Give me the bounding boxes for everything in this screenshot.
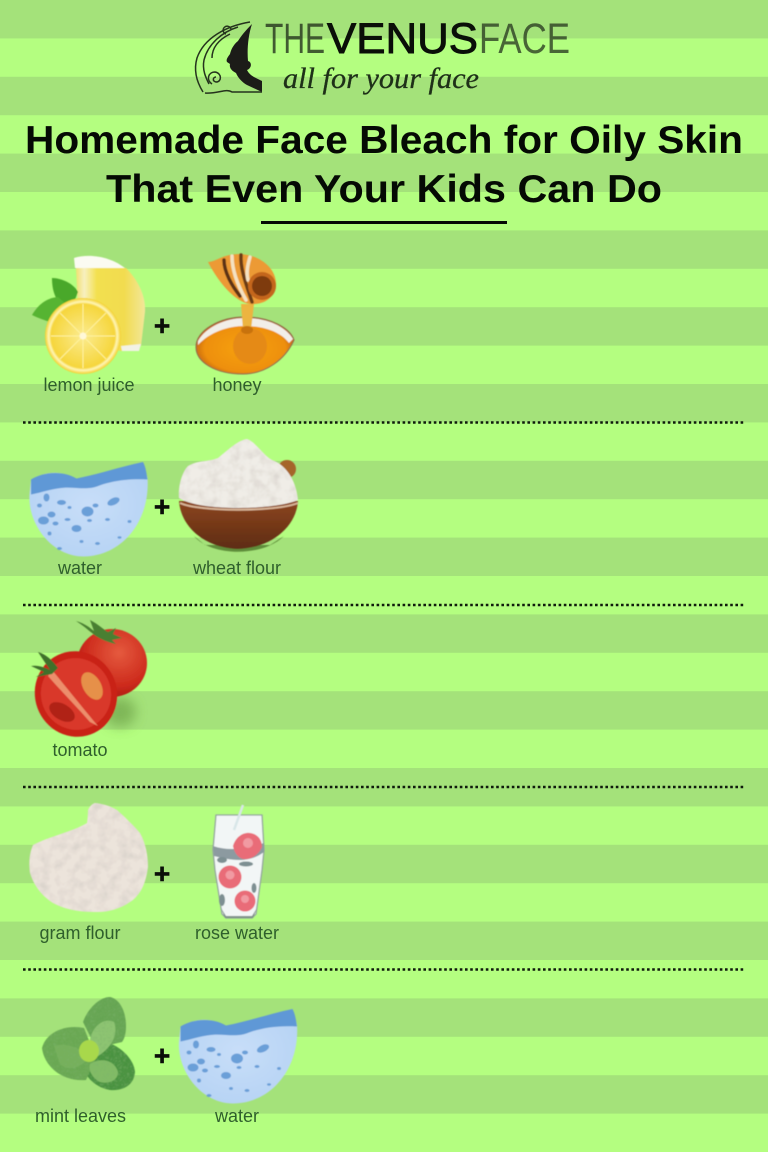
label: lemon juice: lemon juice	[43, 375, 135, 395]
plus: +	[154, 858, 170, 889]
title: That Even Your Kids Can Do	[106, 168, 662, 211]
icon: honey dipper and bowl	[196, 254, 294, 374]
label: mint leaves: mint leaves	[35, 1106, 126, 1126]
divider	[23, 968, 745, 971]
icon: gram flour	[29, 803, 148, 912]
icon: lemon juice glass and lemon	[32, 256, 145, 374]
recipe 2: water + wheat flour	[29, 439, 298, 578]
divider	[23, 421, 745, 424]
label: wheat flour: wheat flour	[192, 558, 281, 578]
logo	[196, 15, 570, 95]
tagline: all for your face	[283, 62, 479, 95]
icon: bowl of wheat flour	[179, 439, 298, 552]
divider	[23, 786, 745, 788]
label: honey: honey	[212, 375, 262, 395]
plus: +	[154, 1040, 170, 1071]
icon: mint leaves	[42, 997, 135, 1090]
recipe 1: lemon juice + honey	[32, 254, 294, 395]
icon: water	[29, 462, 148, 556]
recipe 3: tomato	[23, 620, 147, 760]
recipe 4: gram flour + rose water	[29, 803, 279, 943]
icon: tomatoes	[23, 620, 147, 748]
divider	[23, 604, 745, 606]
plus: +	[154, 491, 170, 522]
label: water: water	[57, 558, 102, 578]
recipe 5: mint leaves + water	[35, 997, 297, 1126]
title underline	[261, 221, 507, 224]
wordmark: THE	[265, 15, 325, 63]
logo: FACE	[479, 15, 570, 63]
icon: glass of rose water	[213, 805, 264, 918]
icon: water	[179, 1009, 297, 1104]
label: water: water	[214, 1106, 259, 1126]
icon: woman's face silhouette with curling hair	[196, 22, 262, 93]
logo: VENUS	[327, 15, 478, 63]
plus: +	[154, 310, 170, 341]
title	[25, 119, 743, 211]
label: rose water: rose water	[195, 923, 279, 943]
label: tomato: tomato	[52, 740, 108, 760]
title: Homemade Face Bleach for Oily Skin	[25, 119, 743, 162]
label: gram flour: gram flour	[39, 923, 121, 943]
